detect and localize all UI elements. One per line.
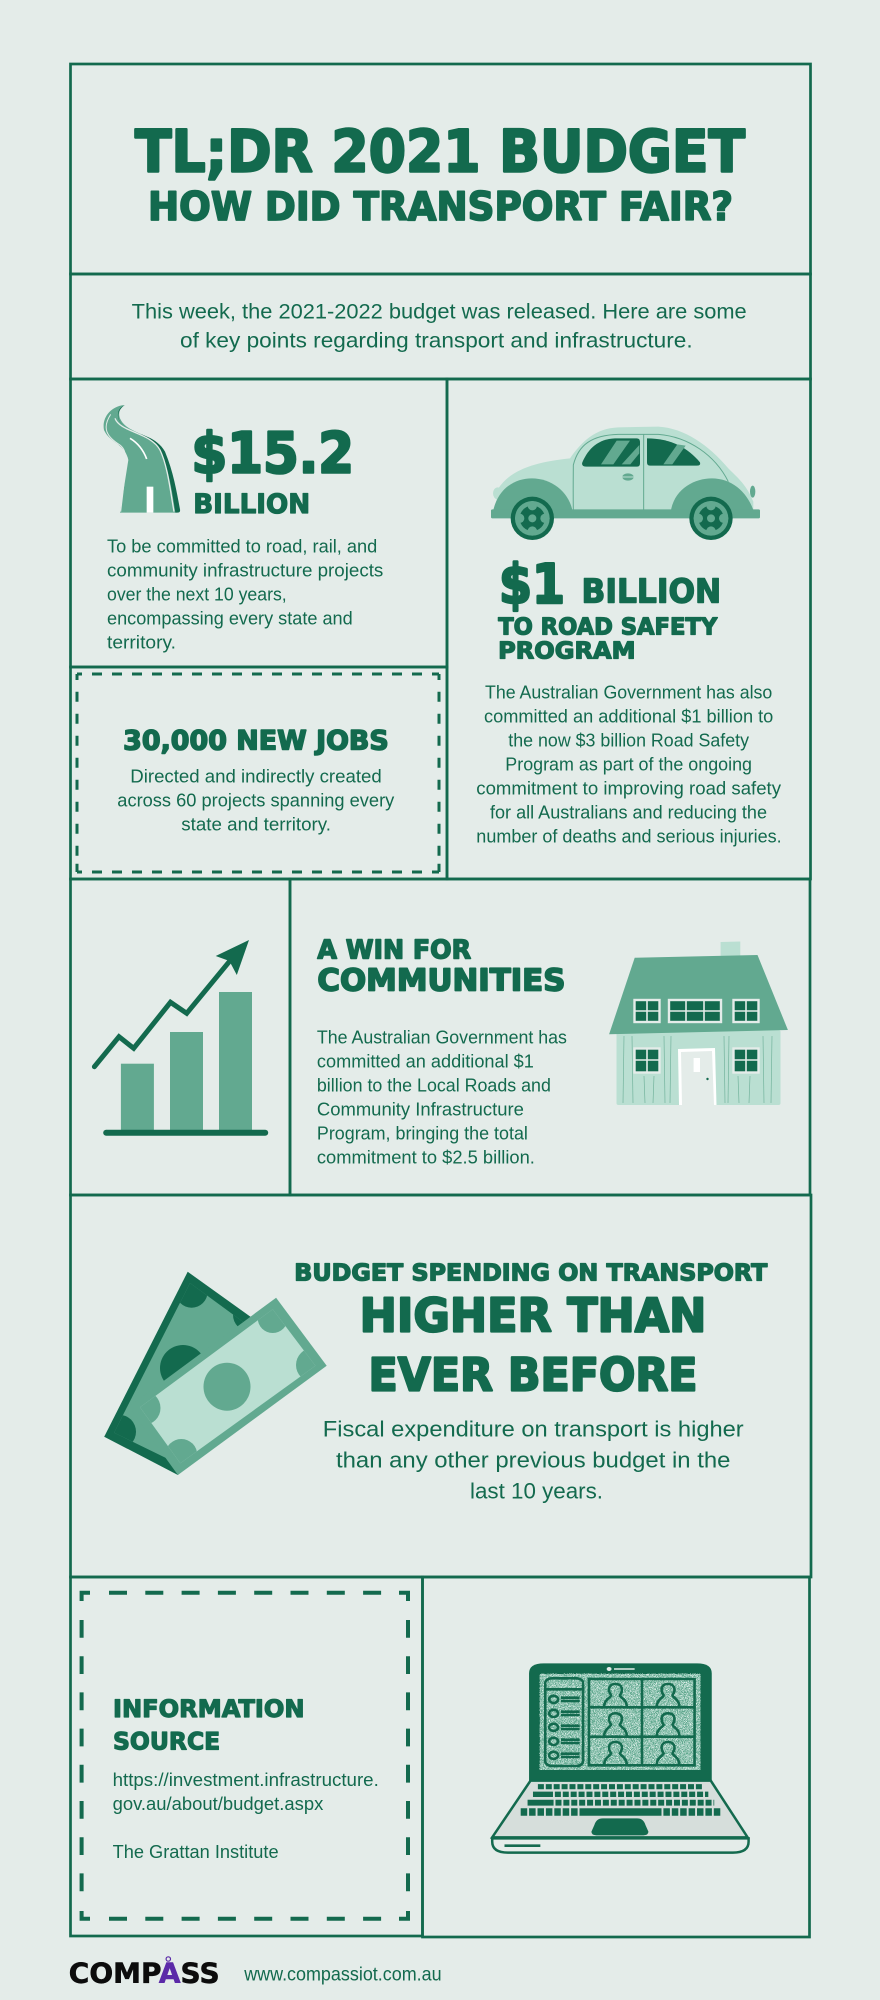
description: over the next 10 years, (107, 584, 287, 604)
amount: $15.2 (192, 422, 354, 486)
subtitle: HOW DID TRANSPORT FAIR? (148, 184, 733, 230)
panel: 15.2 billion (70, 379, 447, 667)
description: The Australian Government has (317, 1027, 567, 1047)
heading: COMMUNITIES (317, 964, 565, 999)
description: community infrastructure projects (107, 560, 383, 580)
intro text (132, 300, 747, 353)
panel: intro (70, 274, 810, 379)
heading: INFORMATION (113, 1695, 305, 1723)
description (323, 1417, 744, 1504)
description: committed an additional $1 (317, 1051, 534, 1071)
icon: road (104, 405, 180, 513)
icon: car (491, 427, 760, 540)
subheading (498, 614, 718, 665)
description: Program, bringing the total (317, 1123, 528, 1143)
description: state and territory. (181, 814, 331, 834)
description (117, 766, 394, 834)
description (317, 1027, 567, 1167)
sources: gov.au/about/budget.aspx (113, 1794, 323, 1814)
heading: EVER BEFORE (368, 1349, 698, 1402)
description: number of deaths and serious injuries. (476, 826, 782, 846)
description: To be committed to road, rail, and (107, 536, 377, 556)
description: Program as part of the ongoing (505, 754, 752, 774)
heading: A WIN FOR (317, 936, 471, 966)
description: commitment to improving road safety (476, 778, 781, 798)
description: for all Australians and reducing the (490, 802, 767, 822)
description: committed an additional $1 billion to (484, 706, 773, 726)
description: the now $3 billion Road Safety (508, 730, 749, 750)
subheading: PROGRAM (498, 639, 636, 665)
description: Community Infrastructure (317, 1099, 524, 1119)
icon: laptop video call (492, 1663, 749, 1853)
heading: HIGHER THAN (360, 1288, 706, 1342)
intro text: This week, the 2021-2022 budget was released. Here are some (132, 300, 747, 324)
description (107, 536, 383, 652)
description: encompassing every state and (107, 608, 353, 628)
heading: 30,000 NEW JOBS (123, 726, 389, 757)
footer logo: COMPASS (69, 1957, 220, 1990)
description (476, 682, 782, 846)
description: billion to the Local Roads and (317, 1075, 551, 1095)
amount: $1 (499, 552, 565, 616)
panel: budget spending (70, 1195, 811, 1577)
description: territory. (107, 632, 176, 652)
panel: new jobs (70, 667, 447, 879)
panel: communities (290, 879, 810, 1195)
subheading: TO ROAD SAFETY (498, 614, 718, 640)
footer url: www.compassiot.com.au (243, 1965, 442, 1986)
panel: chart (70, 879, 290, 1195)
heading: BUDGET SPENDING ON TRANSPORT (294, 1260, 768, 1286)
heading: SOURCE (113, 1728, 220, 1756)
sources (113, 1770, 379, 1862)
unit: BILLION (193, 489, 310, 520)
heading (113, 1695, 305, 1756)
panel: road safety (447, 379, 810, 879)
icon: rising bar chart (94, 940, 268, 1136)
description: The Australian Government has also (485, 682, 772, 702)
panel: information source (70, 1577, 422, 1936)
description: across 60 projects spanning every (117, 790, 394, 810)
description: than any other previous budget in the (336, 1448, 730, 1473)
heading (294, 1260, 768, 1402)
sources: The Grattan Institute (113, 1842, 279, 1862)
unit: BILLION (582, 572, 721, 611)
intro text: of key points regarding transport and infrastructure. (180, 329, 693, 353)
panel: title (70, 64, 810, 274)
icon: house (609, 942, 788, 1105)
heading (317, 936, 565, 999)
description: commitment to $2.5 billion. (317, 1147, 535, 1167)
panel: laptop (422, 1577, 810, 1937)
description: last 10 years. (470, 1479, 603, 1504)
icon: banknotes (102, 1272, 330, 1475)
title: TL;DR 2021 BUDGET (135, 118, 745, 186)
description: Fiscal expenditure on transport is higher (323, 1417, 744, 1442)
sources: https://investment.infrastructure. (113, 1770, 379, 1790)
description: Directed and indirectly created (130, 766, 382, 786)
